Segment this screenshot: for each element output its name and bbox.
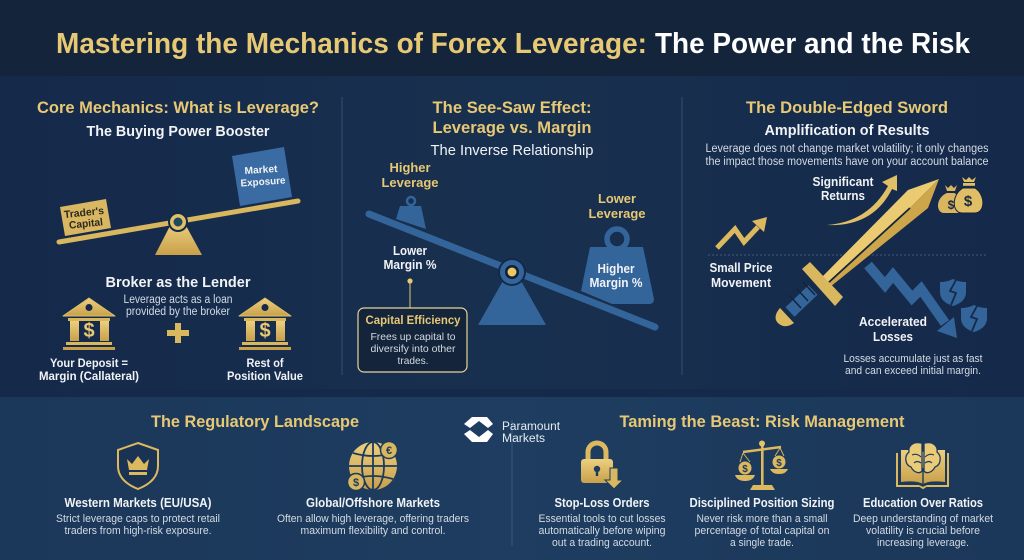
label: lower leverage: Leverage [588, 206, 646, 221]
item: education over ratios: increasing leverage. [877, 537, 969, 549]
item: disciplined position sizing: Disciplined Position Sizing [690, 496, 834, 510]
icon: book with brain [897, 443, 948, 488]
title: Mastering the Mechanics of Forex Leverage: [56, 28, 647, 60]
panel: double-edged sword [706, 98, 989, 377]
chart: tilted see-saw with weights [369, 197, 655, 327]
callout: capital efficiency: Capital Efficiency [366, 313, 461, 327]
label: significant returns [812, 175, 874, 203]
label: rest of position value [227, 356, 303, 383]
label: significant returns: Significant [812, 175, 874, 189]
icon: balance scale [735, 440, 788, 490]
label: accelerated losses: Accelerated [859, 315, 927, 329]
panel: see-saw effect [358, 98, 655, 372]
chart: tilted see-saw with weights: Margin % [590, 276, 642, 290]
text: loan description: provided by the broker [126, 306, 230, 318]
item: education over ratios: Education Over Ratios [863, 496, 983, 510]
item: western markets: Western Markets (EU/USA) [64, 496, 212, 510]
label: significant returns: Returns [821, 189, 865, 203]
item: stop-loss orders: out a trading account. [552, 537, 652, 549]
label: your deposit [39, 356, 139, 383]
label: lower margin: Margin % [384, 258, 436, 272]
subheading: buying power booster: The Buying Power Booster [86, 124, 270, 140]
panel: regulatory landscape [56, 413, 469, 537]
label: higher leverage [382, 160, 438, 190]
label: small price movement [710, 261, 773, 290]
chart: tilted see-saw with weights: Higher [598, 262, 635, 276]
icon: money bags: $ [964, 193, 973, 210]
text: loan description: Leverage acts as a loan [124, 294, 232, 306]
icon: padlock with down arrow [581, 443, 623, 489]
label: your deposit: Your Deposit = [50, 356, 128, 370]
see-saw: capital and market exposure: Market [244, 164, 279, 177]
icon: globe with coins: $ [353, 477, 359, 489]
item: western markets [56, 496, 220, 537]
item: global offshore markets: Global/Offshore Markets [306, 496, 440, 510]
text: losses note: and can exceed initial margin. [845, 365, 981, 377]
heading: broker as the lender: Broker as the Lender [106, 274, 251, 291]
icon: balance scale: $ [776, 458, 782, 469]
label: higher leverage: Higher [390, 160, 430, 175]
label: lower margin [384, 244, 436, 272]
title: The Power and the Risk [655, 28, 971, 60]
item: global offshore markets: Often allow high leverage, offering traders [277, 513, 469, 525]
item: stop-loss orders: Stop-Loss Orders [554, 496, 650, 510]
title [56, 28, 971, 60]
item: disciplined position sizing [690, 496, 834, 549]
icon: bank right: $ [259, 320, 271, 342]
text: losses note [844, 353, 982, 377]
heading: see-saw effect: The See-Saw Effect: [432, 98, 592, 117]
label: small price movement: Movement [711, 276, 772, 290]
callout: capital efficiency [358, 308, 467, 372]
item: disciplined position sizing: Never risk more than a small [696, 513, 828, 525]
heading: core mechanics: Core Mechanics: What is Leverage? [37, 98, 319, 117]
label: lower leverage [588, 191, 646, 221]
heading: regulatory landscape: The Regulatory Landscape [151, 413, 359, 431]
heading: see-saw effect: Leverage vs. Margin [432, 118, 592, 137]
item: global offshore markets [277, 496, 469, 537]
icon: globe with coins: € [386, 445, 392, 457]
icon: bank left: $ [83, 320, 95, 342]
text: volatility note [706, 143, 989, 168]
label: rest of position value: Rest of [246, 356, 284, 370]
subheading: inverse relationship: The Inverse Relationship [430, 142, 594, 159]
item: education over ratios: Deep understanding of market [853, 513, 993, 525]
text: loan description [124, 294, 232, 318]
label: small price movement: Small Price [710, 261, 773, 275]
item: stop-loss orders [538, 496, 666, 549]
label: rest of position value: Position Value [227, 369, 303, 383]
logo: paramount markets: Markets [502, 433, 545, 445]
label: accelerated losses [859, 315, 927, 344]
panel: core mechanics [37, 98, 319, 383]
item: stop-loss orders: Essential tools to cut losses [538, 513, 666, 525]
logo: paramount markets: Paramount [502, 421, 561, 433]
icon: small price movement arrow [717, 217, 767, 248]
see-saw: capital and market exposure: Trader's [63, 205, 105, 221]
item: education over ratios [853, 496, 993, 549]
see-saw: capital and market exposure: Exposure [240, 175, 286, 190]
panel: risk management [538, 413, 993, 549]
item: disciplined position sizing: percentage of total capital on [694, 525, 830, 537]
arrow: accelerated losses [868, 265, 957, 338]
item: stop-loss orders: automatically before wiping [538, 525, 666, 537]
callout: capital efficiency: Frees up capital to [370, 331, 456, 343]
text: volatility note: Leverage does not change market volatility; it only changes [706, 143, 989, 155]
icon: sword [776, 179, 939, 326]
see-saw: capital and market exposure [59, 147, 298, 255]
see-saw: capital and market exposure: Capital [68, 216, 104, 232]
icon: bank left [63, 298, 115, 350]
text: losses note: Losses accumulate just as fast [844, 353, 982, 365]
label: your deposit: Margin (Callateral) [39, 369, 139, 383]
icon: globe with coins [348, 442, 398, 490]
icon: money bags [938, 177, 983, 213]
connector line [407, 278, 413, 308]
heading: see-saw effect [432, 98, 592, 137]
text: volatility note: the impact those movements have on your account balance [706, 156, 988, 168]
heading: taming the beast: Taming the Beast: Risk Management [620, 413, 905, 431]
label: lower leverage: Lower [598, 191, 636, 206]
icon: shield with crown [118, 443, 158, 489]
item: disciplined position sizing: a single trade. [730, 537, 794, 549]
arrow: returns curve [827, 175, 897, 225]
callout: capital efficiency: trades. [398, 355, 428, 367]
item: global offshore markets: maximum flexibility and control. [300, 525, 446, 537]
item: western markets: traders from high-risk exposure. [64, 525, 212, 537]
icon: money bags: $ [948, 198, 955, 212]
label: higher leverage: Leverage [382, 175, 438, 190]
subheading: amplification of results: Amplification of Results [764, 123, 930, 139]
item: education over ratios: volatility is crucial before [866, 525, 980, 537]
label: lower margin: Lower [393, 244, 427, 258]
icon: broken shields [940, 279, 987, 332]
icon: plus [167, 323, 189, 343]
icon: balance scale: $ [742, 464, 748, 475]
label: accelerated losses: Losses [873, 330, 913, 344]
callout: capital efficiency: diversify into other [370, 343, 456, 355]
logo: paramount markets [464, 417, 561, 445]
icon: bank right [239, 298, 291, 350]
heading: double-edged sword: The Double-Edged Sword [746, 98, 948, 117]
item: western markets: Strict leverage caps to protect retail [56, 513, 220, 525]
